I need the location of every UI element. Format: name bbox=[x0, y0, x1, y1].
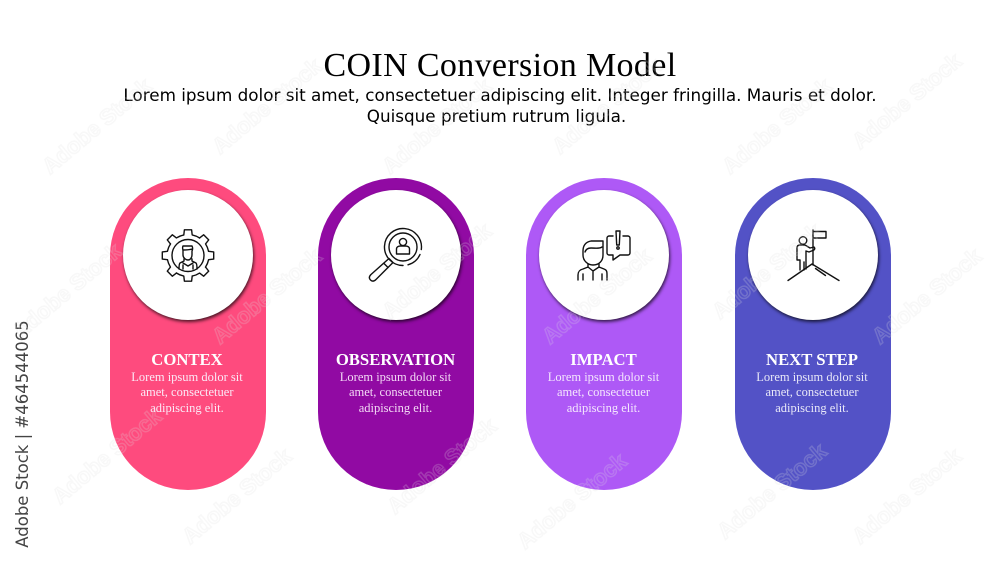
label: next step: NEXT STEP bbox=[766, 350, 858, 369]
label: observation: OBSERVATION bbox=[336, 350, 455, 369]
label: next step: adipiscing elit. bbox=[775, 401, 849, 415]
subtitle text: Lorem ipsum dolor sit amet, consectetuer adipiscing elit. Integer fringilla. Mauris et dolor. bbox=[123, 85, 877, 105]
watermark pattern: Adobe Stock bbox=[717, 73, 837, 179]
watermark pattern: Adobe Stock bbox=[377, 218, 497, 324]
text: Adobe Stock | #464544065 bbox=[13, 320, 32, 548]
watermark pattern: Adobe Stock bbox=[537, 243, 657, 349]
panel: impact bbox=[526, 178, 682, 490]
label: contex: Lorem ipsum dolor sit bbox=[131, 370, 243, 384]
panel: next step bbox=[734, 178, 890, 490]
watermark pattern: Adobe Stock bbox=[867, 243, 987, 349]
subtitle text: Quisque pretium rutrum ligula. bbox=[367, 106, 626, 126]
icon: magnifier with person bbox=[331, 190, 461, 320]
label: observation: Lorem ipsum dolor sit bbox=[340, 370, 451, 384]
watermark pattern: Adobe Stock bbox=[547, 53, 667, 159]
label: next step: amet, consectetuer bbox=[765, 385, 858, 399]
icon: person in gear bbox=[122, 190, 252, 320]
watermark pattern: Adobe Stock bbox=[512, 448, 632, 554]
watermark pattern: Adobe Stock bbox=[377, 73, 497, 179]
watermark pattern: Adobe Stock bbox=[382, 413, 502, 519]
label: observation: adipiscing elit. bbox=[359, 401, 432, 415]
label: contex bbox=[131, 350, 243, 415]
label: impact bbox=[548, 350, 660, 415]
subtitle text bbox=[123, 85, 877, 126]
watermark pattern: Adobe Stock bbox=[847, 443, 967, 549]
watermark pattern: Adobe Stock bbox=[707, 218, 827, 324]
label: impact: adipiscing elit. bbox=[567, 401, 640, 415]
label: next step: Lorem ipsum dolor sit bbox=[756, 370, 868, 384]
label: observation bbox=[336, 350, 455, 415]
watermark pattern: Adobe Stock bbox=[37, 73, 157, 179]
title: COIN Conversion Model bbox=[324, 47, 676, 84]
watermark pattern: Adobe Stock bbox=[177, 443, 297, 549]
label: contex: adipiscing elit. bbox=[150, 401, 224, 415]
panel: observation bbox=[318, 178, 474, 490]
panel: contex bbox=[110, 178, 266, 490]
label: impact: amet, consectetuer bbox=[557, 385, 650, 399]
watermark pattern: Adobe Stock bbox=[207, 53, 327, 159]
watermark pattern: Adobe Stock bbox=[847, 48, 967, 154]
label: observation: amet, consectetuer bbox=[349, 385, 442, 399]
label: next step bbox=[756, 350, 868, 415]
icon: man with alert speech bubble bbox=[539, 190, 669, 320]
label: contex: amet, consectetuer bbox=[140, 385, 234, 399]
label: impact: IMPACT bbox=[570, 350, 637, 369]
watermark pattern: Adobe Stock bbox=[47, 403, 167, 509]
icon: person with flag on mountain bbox=[748, 190, 878, 320]
label: impact: Lorem ipsum dolor sit bbox=[548, 370, 659, 384]
watermark pattern: Adobe Stock bbox=[712, 438, 832, 544]
watermark pattern: Adobe Stock bbox=[207, 243, 327, 349]
label: contex: CONTEX bbox=[151, 350, 223, 369]
watermark pattern: Adobe Stock bbox=[7, 238, 127, 344]
